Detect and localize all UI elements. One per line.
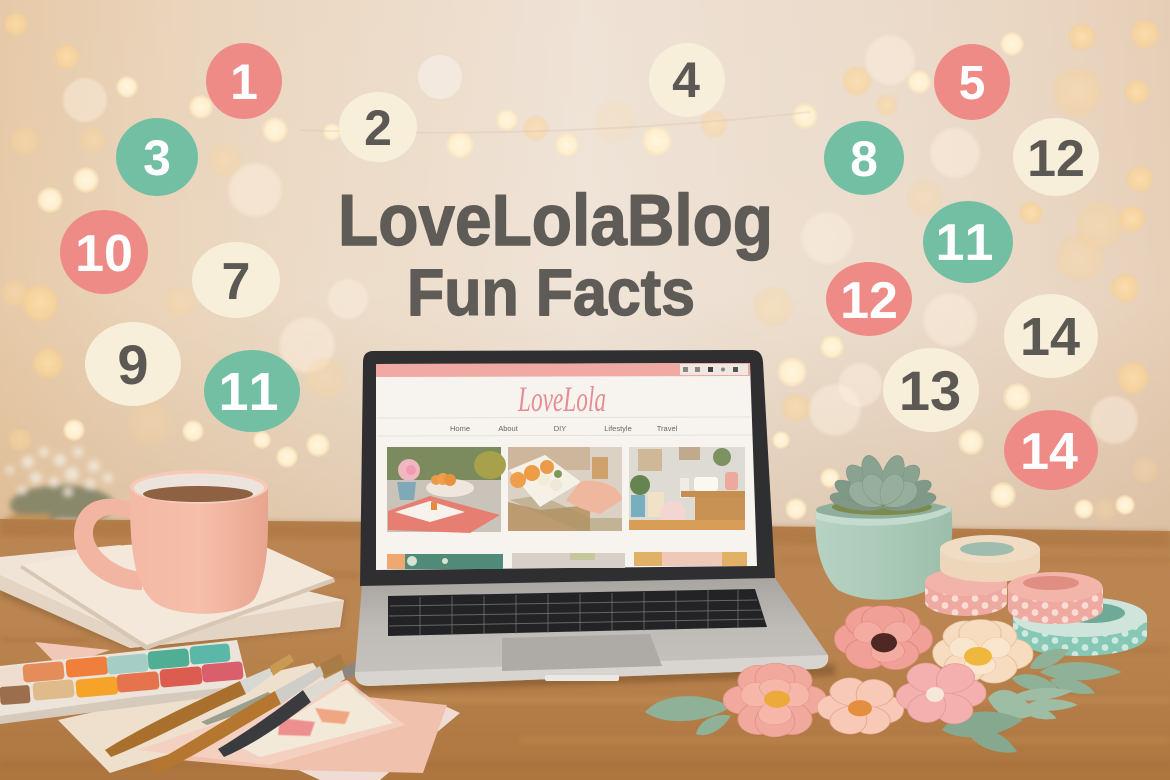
flower: large pink — [723, 660, 827, 740]
blurred wall background — [0, 0, 1170, 540]
web page — [376, 363, 757, 570]
badge 14 pink — [1004, 410, 1098, 490]
photo: table setting — [387, 447, 506, 533]
paper flowers and leaves — [644, 601, 1122, 759]
title: Fun Facts — [407, 255, 695, 329]
badge 11 left: 11 — [218, 362, 282, 422]
paint swatches — [278, 718, 315, 736]
badge 11 right: 11 — [936, 214, 996, 272]
blurred flower bouquet in background — [6, 447, 114, 550]
badge 2: 2 — [364, 100, 392, 156]
laptop base — [355, 578, 828, 686]
badge 12 pink — [826, 262, 912, 336]
mug body — [130, 487, 268, 614]
page nav: About — [498, 424, 519, 433]
bokeh fairy lights — [1, 12, 1160, 522]
badge 3 — [116, 118, 198, 196]
badge 5: 5 — [959, 57, 985, 110]
badge 2 — [339, 92, 417, 162]
washi tape rolls — [925, 535, 1147, 656]
badge 9 — [85, 322, 181, 406]
badge 4 — [649, 43, 725, 117]
succulent leaves — [829, 453, 937, 516]
badge 1: 1 — [230, 54, 258, 110]
badge 13 — [883, 348, 979, 432]
badge 12 pink: 12 — [840, 272, 898, 330]
badge 9: 9 — [117, 333, 149, 396]
notebooks stack — [0, 540, 345, 650]
coffee — [143, 486, 253, 502]
page nav — [377, 417, 752, 436]
page nav: DIY — [554, 424, 566, 433]
badge 7: 7 — [222, 253, 250, 311]
badge 10 — [60, 210, 148, 294]
title — [338, 181, 773, 329]
wooden table — [0, 519, 1170, 780]
badge 10: 10 — [75, 225, 133, 283]
badge 3: 3 — [143, 130, 171, 186]
badge 12 — [1013, 118, 1099, 196]
flower: dark-centre pink — [834, 601, 932, 675]
page logo: LoveLola — [517, 379, 606, 419]
badge 5 — [934, 44, 1010, 120]
number badges — [60, 43, 1099, 490]
hinge notch — [545, 675, 619, 681]
photo: shelf scene — [629, 447, 745, 530]
paint wells — [0, 643, 244, 705]
pink tape right — [1008, 572, 1103, 624]
brush 2 — [148, 654, 347, 774]
badge 14 cream: 14 — [1020, 307, 1080, 367]
badge 7 — [192, 242, 280, 318]
page nav: Lifestyle — [604, 424, 632, 433]
page nav: Home — [450, 424, 470, 433]
paint brushes — [105, 654, 369, 774]
badge 14 pink: 14 — [1020, 423, 1078, 481]
coffee mug — [74, 470, 268, 614]
watercolor papers — [35, 642, 460, 780]
lower photo row — [387, 552, 747, 569]
planter back rim — [816, 500, 950, 520]
succulent plant — [815, 453, 952, 600]
palette knife — [201, 692, 280, 725]
title: LoveLolaBlog — [338, 181, 773, 261]
flower: pale pink — [893, 658, 986, 729]
keyboard — [388, 589, 767, 636]
page header bar — [376, 363, 750, 377]
pink tape left — [925, 568, 1007, 616]
laptop — [355, 350, 835, 692]
planter — [815, 505, 952, 600]
beige tape — [940, 535, 1040, 582]
photo: food tray — [508, 447, 622, 531]
touchpad — [502, 634, 662, 671]
badge 11 right — [923, 201, 1013, 283]
flower: cream — [931, 615, 1035, 689]
badge 4: 4 — [672, 52, 700, 108]
badge 14 cream — [1004, 294, 1098, 378]
green paper leaves — [644, 642, 1122, 759]
paint palette — [0, 640, 250, 724]
page nav: Travel — [657, 424, 678, 433]
brush 3 — [218, 658, 369, 757]
badge 1 — [206, 43, 282, 119]
mug handle — [74, 499, 142, 590]
laptop screen bezel — [360, 350, 775, 586]
badge 8: 8 — [850, 131, 878, 187]
badge 11 left — [204, 350, 300, 432]
badge 12: 12 — [1027, 130, 1085, 188]
flower: peach — [816, 673, 907, 739]
green tape — [1013, 597, 1147, 656]
badge 13: 13 — [899, 359, 961, 422]
badge 8 — [824, 121, 904, 195]
brush 1 — [105, 654, 294, 757]
